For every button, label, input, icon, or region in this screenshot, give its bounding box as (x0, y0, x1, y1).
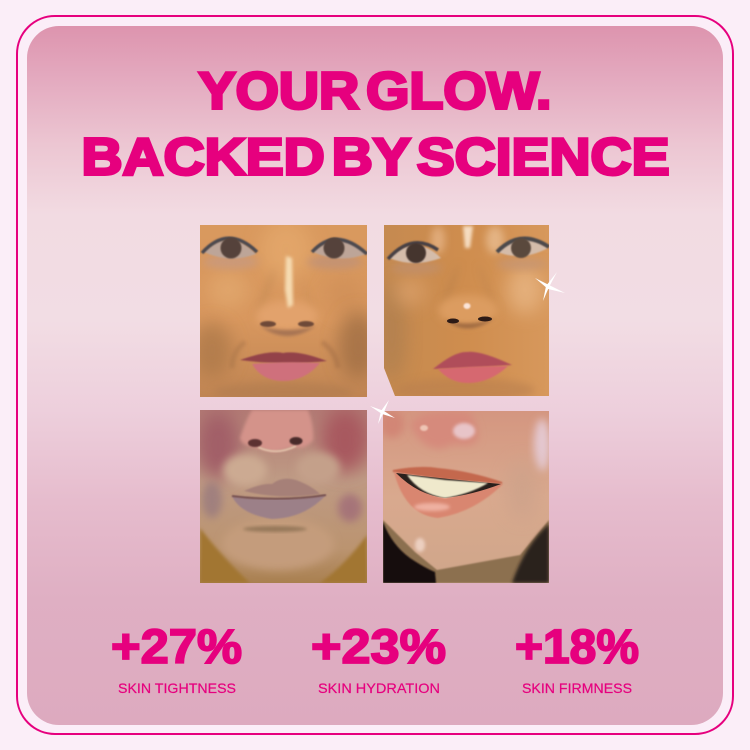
stat: skin hydration: SKIN HYDRATION (318, 680, 440, 696)
icon: sparkle right (535, 272, 565, 301)
title: YOUR GLOW. (198, 62, 552, 120)
photo: before, upper face (200, 225, 367, 397)
title: BACKED BY SCIENCE (82, 128, 670, 186)
stat: skin hydration (311, 621, 446, 696)
stat: skin tightness: SKIN TIGHTNESS (118, 680, 236, 696)
title (82, 62, 670, 186)
photo: after, smiling lower face (380, 410, 550, 583)
stat: skin tightness (111, 621, 242, 696)
photo: after, upper face (378, 225, 549, 402)
stat: skin tightness: +27% (111, 621, 242, 674)
stat: skin hydration: +23% (311, 621, 446, 674)
stat: skin firmness: +18% (515, 621, 639, 674)
icon: sparkle centre (370, 400, 395, 424)
stat: skin firmness: SKIN FIRMNESS (522, 680, 632, 696)
photo: before, lower face (196, 408, 369, 583)
